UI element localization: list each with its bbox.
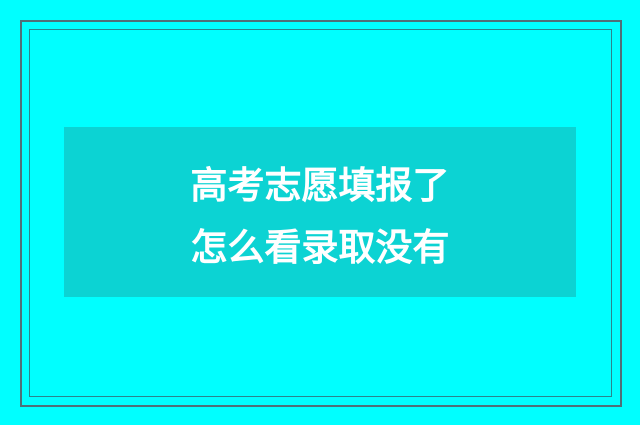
title line 2: 怎么看录取没有 (190, 227, 450, 268)
panel: title band (64, 127, 576, 297)
title line 1: 高考志愿填报了 (190, 165, 450, 206)
inner frame (29, 29, 612, 397)
